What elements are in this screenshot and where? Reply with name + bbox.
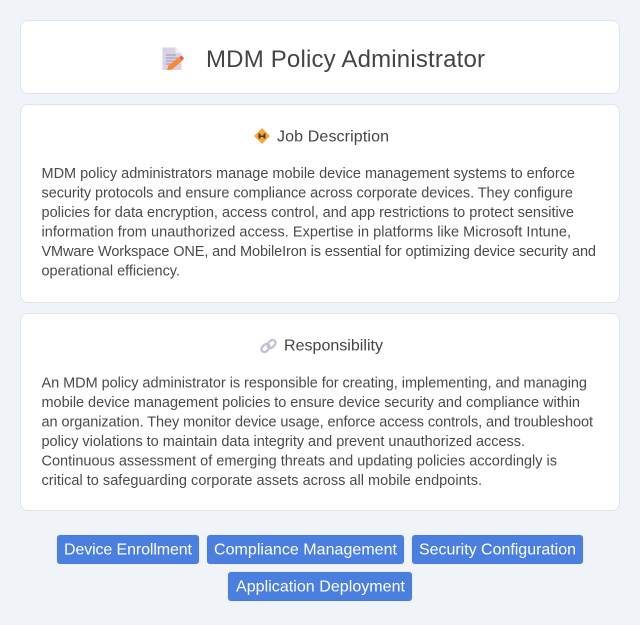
heading: Responsibility: Responsibility (284, 338, 383, 354)
job description text (42, 166, 596, 280)
button: Security Configuration (412, 535, 583, 564)
job description text: security protocols and ensure compliance across corporate devices. They configure (42, 186, 573, 202)
button: Device Enrollment (57, 535, 199, 564)
button: Compliance Management (207, 535, 404, 564)
job description text: MDM policy administrators manage mobile device management systems to enforce (42, 166, 575, 182)
job description text: information from unauthorized access. Expertise in platforms like Microsoft Intune, (42, 224, 571, 240)
button labels: Compliance Management (214, 542, 398, 558)
button labels: Application Deployment (236, 578, 406, 596)
job description text: operational efficiency. (42, 264, 180, 280)
job description text: VMware Workspace ONE, and MobileIron is essential for optimizing device security and (42, 244, 596, 260)
job description text: policies for data encryption, access control, and app restrictions to protect sensitive (42, 205, 574, 221)
icon: link (260, 339, 277, 353)
panel: title card (20, 20, 620, 94)
icon: orange diamond (254, 128, 270, 144)
responsibility text: policy violations to maintain data integrity and prevent unauthorized access. (42, 434, 525, 450)
responsibility text: an organization. They monitor device usage, enforce access controls, and troubleshoot (42, 414, 593, 430)
title: MDM Policy Administrator (206, 46, 485, 73)
panel: job description (20, 104, 620, 303)
responsibility text: mobile device management policies to ensure device security and compliance within (42, 395, 580, 411)
panel: responsibility (20, 313, 620, 511)
icon: memo with pencil (162, 48, 184, 70)
responsibility text: critical to safeguarding corporate assets across all mobile endpoints. (42, 473, 482, 489)
button labels: Device Enrollment (64, 542, 193, 558)
button labels: Security Configuration (419, 542, 576, 558)
responsibility text: Continuous assessment of emerging threats and updating policies accordingly is (42, 454, 557, 470)
responsibility text (42, 376, 593, 489)
heading: Job Description: Job Description (277, 128, 389, 146)
button labels (64, 542, 576, 596)
responsibility text: An MDM policy administrator is responsible for creating, implementing, and managing (42, 376, 587, 392)
button: Application Deployment (228, 572, 412, 601)
